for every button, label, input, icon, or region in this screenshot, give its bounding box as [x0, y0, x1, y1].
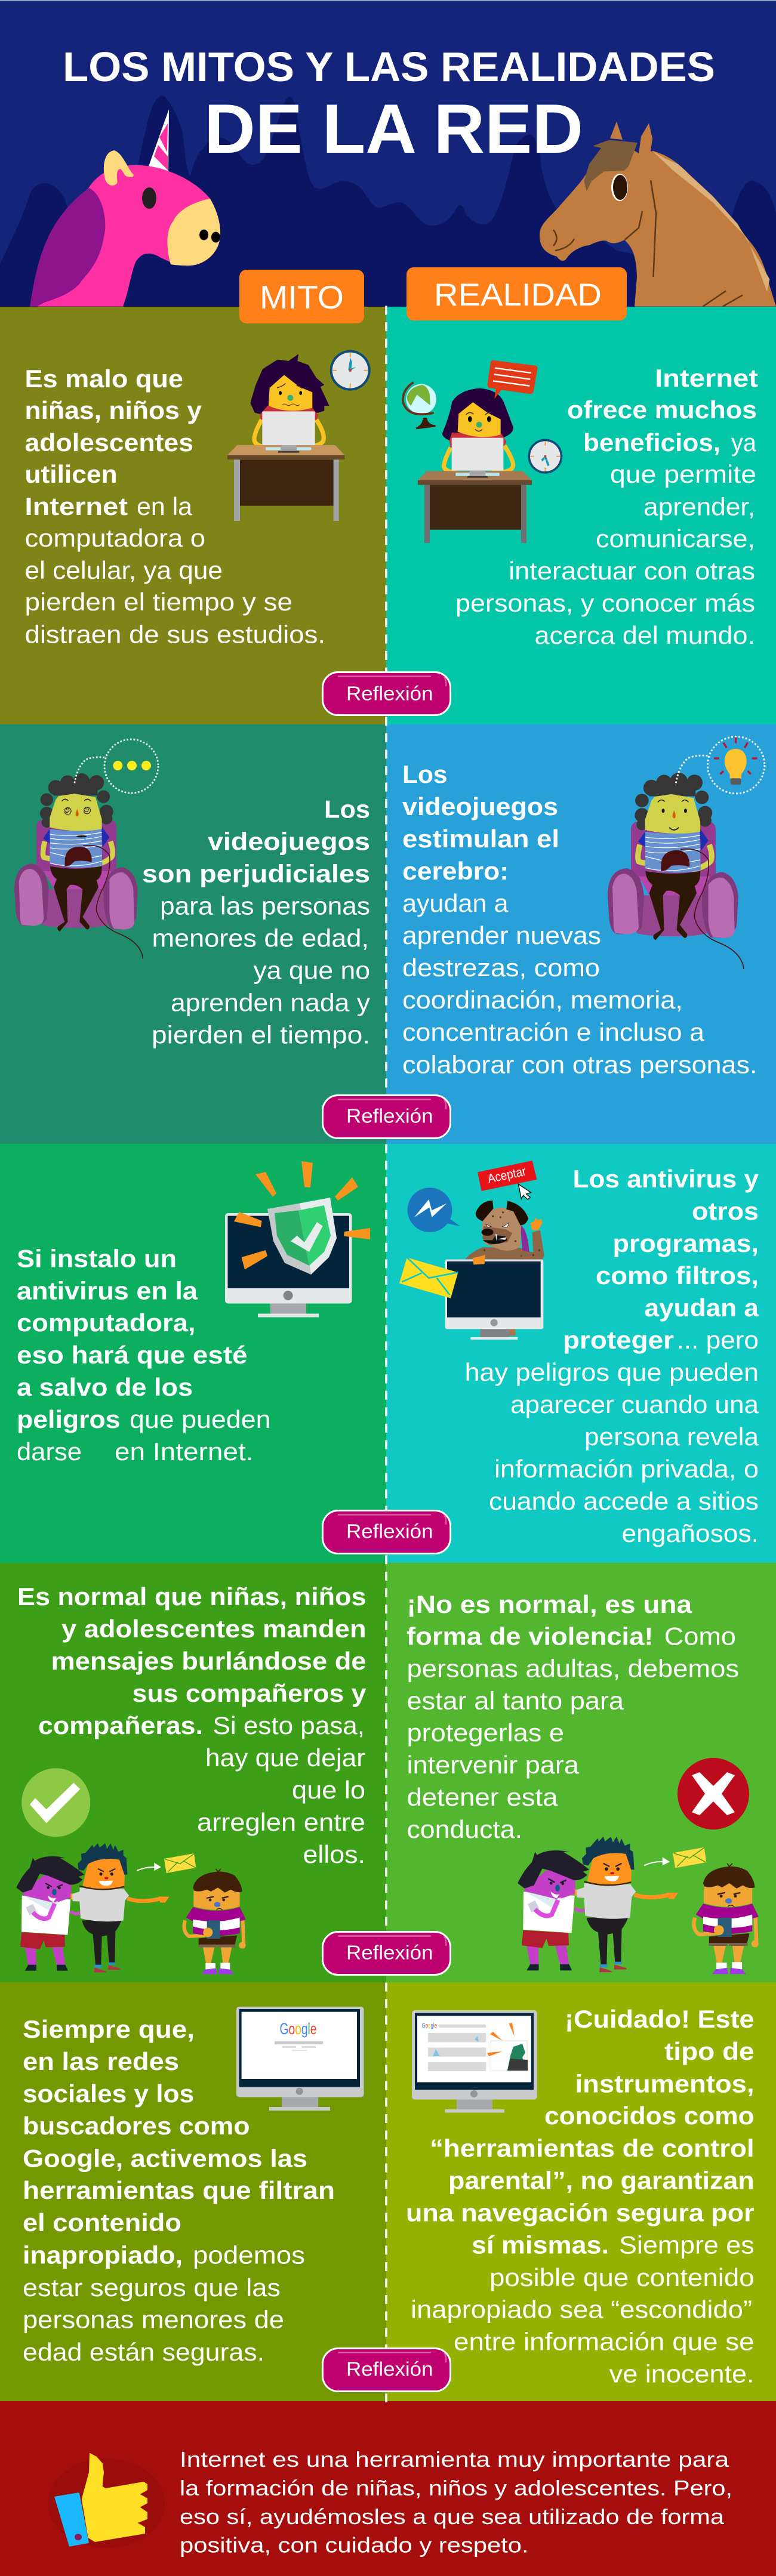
icon: unicorn	[30, 109, 220, 307]
text: mito 2: Los	[324, 795, 370, 823]
text: realidad 3: Los antivirus y	[573, 1165, 759, 1193]
text: mito 4: compañeras.	[38, 1711, 203, 1739]
text: realidad 2: concentración e incluso a	[402, 1018, 705, 1046]
text: mito 2: menores de edad,	[152, 924, 369, 952]
text: mito 1: distraen de sus estudios.	[25, 621, 325, 648]
tab: mito: MITO	[260, 279, 344, 316]
text: mito 3: a salvo de los	[17, 1373, 193, 1401]
text: realidad 5: sí mismas.	[472, 2231, 609, 2259]
text: realidad 4: Como	[664, 1622, 736, 1651]
illustration: monitor with hidden inappropriate content	[412, 2010, 537, 2112]
panel: fila 4 mito	[0, 1563, 386, 1982]
text: realidad 5: tipo de	[664, 2037, 755, 2065]
text: mito 4: arreglen entre	[197, 1808, 365, 1836]
text: mito 4: Es normal que niñas, niños	[17, 1582, 367, 1611]
text: mito 1: niñas, niños y	[25, 396, 202, 424]
text: realidad 1: ofrece muchos	[567, 396, 757, 424]
panel: fila 4 realidad	[386, 1563, 776, 1982]
text: conclusion	[180, 2447, 732, 2558]
illustration: happy gamer with idea bulb	[608, 737, 765, 969]
text: realidad 5	[406, 2005, 755, 2388]
text: mito 3: que pueden	[130, 1405, 271, 1433]
text: mito 4: que lo	[292, 1776, 365, 1804]
button: reflexion 2: Reflexión	[346, 1105, 433, 1127]
text: realidad 1	[455, 364, 758, 649]
text: mito 1: Es malo que	[25, 365, 183, 393]
panel: fila 5 mito	[0, 1982, 386, 2401]
illustration: hyena behind monitor with messenger and envelope: Aceptar	[486, 1164, 527, 1186]
text: realidad 2: destrezas, como	[402, 954, 600, 982]
panel: fila 3 mito	[0, 1144, 386, 1563]
text: mito 2: pierden el tiempo.	[152, 1020, 370, 1049]
text: mito 3: antivirus en la	[17, 1277, 198, 1304]
text: realidad 1: que permite	[610, 460, 756, 488]
text: realidad 1: ya	[731, 428, 757, 456]
text: realidad 5: una navegación segura por	[406, 2198, 755, 2227]
tab: mito	[239, 270, 364, 323]
text: realidad 4: detener esta	[407, 1783, 558, 1811]
text: mito 2: para las personas	[160, 891, 370, 920]
text: mito 4: hay que dejar	[205, 1744, 365, 1772]
text: mito 1: computadora o	[25, 524, 205, 552]
text: mito 5: herramientas que filtran	[23, 2176, 335, 2204]
text: mito 2	[142, 795, 370, 1049]
panel: fila 1 realidad	[386, 307, 776, 724]
text: realidad 1: aprender,	[643, 493, 755, 520]
text: realidad 1: comunicarse,	[596, 525, 755, 553]
text: realidad 4	[407, 1590, 739, 1843]
text: conclusion: eso sí, ayudémosles a que sea utilizado de forma	[180, 2504, 725, 2529]
text: mito 1: pierden el tiempo y se	[25, 588, 292, 616]
text: realidad 2: estimulan el	[402, 825, 559, 853]
text: mito 5: Google, activemos las	[23, 2145, 307, 2172]
text: mito 5: el contenido	[23, 2208, 181, 2236]
text: mito 1: el celular, ya que	[25, 556, 223, 584]
panel: fila 5 realidad	[386, 1982, 776, 2401]
text: realidad 3: información privada, o	[494, 1455, 759, 1483]
text: mito 3: computadora,	[17, 1309, 196, 1337]
button: reflexion 3	[322, 1511, 450, 1554]
text: mito 5: buscadores como	[23, 2112, 250, 2140]
illustration: bullies mocking a classmate (mito)	[16, 1843, 246, 1974]
text: mito 4: mensajes burlándose de	[51, 1647, 367, 1675]
text: realidad 1: beneficios,	[583, 428, 720, 456]
text: realidad 5: entre información que se	[454, 2327, 755, 2356]
text: realidad 5: ¡Cuidado! Este	[565, 2005, 755, 2033]
text: realidad 3: ayudan a	[645, 1294, 759, 1322]
panel: fila 1 mito	[0, 307, 386, 724]
text: realidad 5: Siempre es	[619, 2231, 755, 2259]
text: conclusion: positiva, con cuidado y respeto.	[180, 2533, 529, 2558]
text: mito 1: adolescentes	[25, 428, 193, 456]
icon: check	[21, 1768, 90, 1837]
header dark mountains	[0, 95, 776, 307]
text: realidad 3: aparecer cuando una	[510, 1390, 759, 1418]
text: mito 3	[17, 1245, 271, 1466]
text: realidad 3: programas,	[612, 1229, 759, 1257]
text: realidad 2	[402, 760, 757, 1079]
illustration: monitor with hidden inappropriate content: Google	[421, 2022, 437, 2029]
text: realidad 2: colaborar con otras personas.	[402, 1050, 757, 1079]
text: realidad 5: inapropiado sea “escondido”	[411, 2295, 752, 2324]
text: realidad 4: intervenir para	[407, 1751, 580, 1779]
button: reflexion 5	[322, 2349, 450, 2392]
button: reflexion 2	[322, 1096, 450, 1139]
text: mito 4: ellos.	[303, 1840, 365, 1868]
text: mito 4: Si esto pasa,	[213, 1711, 365, 1739]
button: reflexion 4	[322, 1932, 450, 1975]
panel: fila 3 realidad	[386, 1144, 776, 1563]
text: realidad 3: hay peligros que pueden	[464, 1358, 759, 1386]
text: realidad 5: ve inocente.	[609, 2359, 755, 2388]
text: realidad 5: “herramientas de control	[430, 2134, 755, 2162]
text: realidad 4: estar al tanto para	[407, 1686, 624, 1715]
text: mito 5: estar seguros que las	[23, 2273, 281, 2302]
text: mito 4: y adolescentes manden	[61, 1615, 367, 1643]
illustration: hyena behind monitor with messenger and envelope	[399, 1161, 544, 1340]
icon: horse	[540, 122, 776, 307]
text: mito 3: en Internet.	[115, 1437, 253, 1466]
button: reflexion 5: Reflexión	[346, 2358, 433, 2380]
text: conclusion: la formación de niñas, niños y adolescentes. Pero,	[180, 2476, 732, 2500]
illustration: happy girl at desk with globe, message and clock	[403, 360, 562, 543]
button: reflexion 4: Reflexión	[346, 1942, 433, 1963]
text: realidad 4: protegerlas e	[407, 1719, 564, 1747]
text: mito 3: peligros	[17, 1405, 120, 1433]
panel: fila 2 mito	[0, 724, 386, 1144]
text: mito 5	[23, 2015, 335, 2366]
text: realidad 1: personas, y conocer más	[455, 589, 755, 617]
illustration: dizzy gamer in armchair	[14, 739, 158, 959]
illustration: worried girl at desk with clock	[227, 350, 371, 521]
text: mito 1	[25, 365, 325, 648]
text: realidad 1: Internet	[655, 364, 758, 392]
text: mito 3: Si instalo un	[17, 1245, 177, 1272]
text: realidad 5: posible que contenido	[489, 2263, 755, 2291]
text: mito 4	[17, 1582, 367, 1868]
text: mito 5: podemos	[193, 2241, 305, 2269]
text: realidad 4: forma de violencia!	[407, 1622, 653, 1651]
text: realidad 3	[464, 1165, 759, 1547]
text: realidad 3: otros	[692, 1197, 759, 1225]
button: reflexion 1	[322, 672, 450, 715]
text: realidad 2: videojuegos	[402, 792, 558, 820]
button: reflexion 1: Reflexión	[346, 683, 433, 704]
header background	[0, 0, 776, 307]
text: realidad 5: parental”, no garantizan	[448, 2166, 755, 2195]
text: mito 5: inapropiado,	[23, 2241, 183, 2269]
text: mito 1: Internet	[25, 492, 128, 520]
text: realidad 5: conocidos como	[544, 2102, 755, 2130]
text: realidad 1: acerca del mundo.	[535, 621, 755, 649]
text: mito 2: videojuegos	[208, 827, 370, 856]
text: realidad 2: Los	[402, 760, 448, 788]
text: realidad 3: como filtros,	[596, 1261, 759, 1289]
text: realidad 2: aprender nuevas	[402, 921, 601, 949]
text: mito 5: sociales y los	[23, 2080, 194, 2108]
text: mito 1: utilicen	[25, 460, 117, 488]
text: realidad 4: ¡No es normal, es una	[407, 1590, 692, 1618]
title	[63, 44, 715, 168]
text: realidad 3: engañosos.	[622, 1519, 759, 1547]
text: realidad 4: conducta.	[407, 1815, 522, 1843]
illustration: monitor with google: Google	[279, 2020, 316, 2038]
text: conclusion: Internet es una herramienta muy importante para	[180, 2447, 729, 2472]
text: realidad 2: cerebro:	[402, 857, 509, 885]
text: mito 2: son perjudiciales	[142, 859, 370, 888]
tab: realidad	[407, 267, 627, 320]
text: realidad 2: coordinación, memoria,	[402, 986, 683, 1014]
text: mito 5: personas menores de	[23, 2306, 284, 2333]
illustration: bullies mocking a classmate (realidad)	[518, 1837, 759, 1974]
text: mito 2: aprenden nada y	[171, 988, 370, 1017]
illustration: monitor with antivirus shield	[225, 1161, 370, 1318]
text: realidad 4: personas adultas, debemos	[407, 1654, 739, 1683]
text: mito 5: edad están seguras.	[23, 2338, 264, 2366]
title: DE LA RED	[204, 90, 583, 168]
text: realidad 3: persona revela	[584, 1423, 759, 1451]
text: mito 3: eso hará que esté	[17, 1341, 247, 1369]
text: mito 3: darse	[17, 1437, 82, 1466]
illustration: monitor with google	[236, 2007, 364, 2111]
title: LOS MITOS Y LAS REALIDADES	[63, 44, 715, 90]
text: mito 4: sus compañeros y	[133, 1679, 367, 1707]
icon: thumbs up	[48, 2453, 165, 2548]
text: mito 5: Siempre que,	[23, 2015, 195, 2043]
text: realidad 3: ... pero	[677, 1326, 759, 1354]
panel: fila 2 realidad	[386, 724, 776, 1144]
text: realidad 1: interactuar con otras	[509, 557, 755, 585]
panel: conclusion	[0, 2401, 776, 2576]
text: realidad 2: ayudan a	[402, 889, 509, 917]
tab: realidad: REALIDAD	[434, 277, 602, 313]
text: mito 5: en las redes	[23, 2047, 179, 2075]
text: mito 2: ya que no	[253, 956, 370, 985]
text: mito 1: en la	[137, 492, 193, 520]
text: realidad 5: instrumentos,	[575, 2069, 755, 2098]
text: realidad 3: cuando accede a sitios	[489, 1487, 759, 1515]
button: reflexion 3: Reflexión	[346, 1520, 433, 1542]
text: realidad 3: proteger	[563, 1326, 674, 1354]
icon: cross	[678, 1758, 749, 1830]
